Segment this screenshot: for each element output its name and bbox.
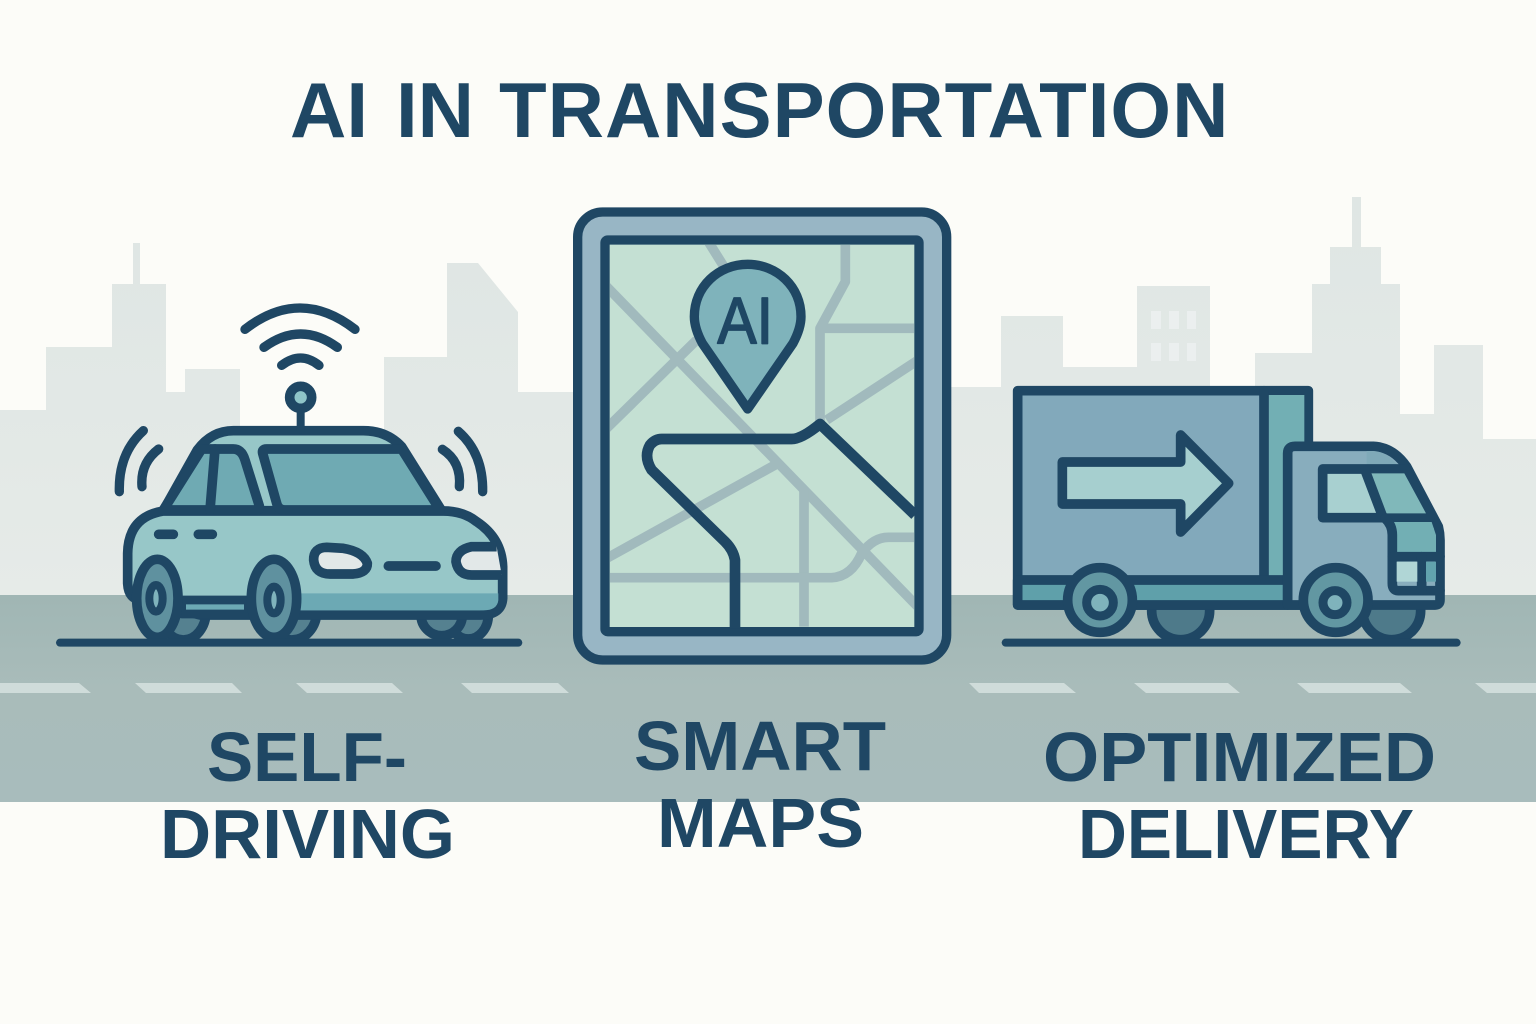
label: self-driving: DRIVING — [160, 795, 455, 873]
ground line — [60, 631, 518, 655]
window pillar — [210, 449, 215, 510]
title: AI — [290, 66, 390, 154]
side skirt — [182, 600, 248, 614]
front near wheel — [251, 559, 297, 637]
lower body band — [300, 593, 498, 610]
icon: delivery truck — [1006, 391, 1457, 643]
city skyline left — [0, 243, 575, 600]
cargo box — [1018, 391, 1308, 605]
ground line — [1006, 631, 1457, 655]
map screen — [605, 240, 919, 632]
label: optimized delivery: DELIVERY — [1078, 795, 1414, 873]
cargo arrow — [1062, 435, 1229, 532]
car body — [128, 511, 503, 615]
cabin — [163, 431, 442, 511]
icon: self-driving car — [60, 308, 518, 643]
title: IN — [396, 66, 496, 154]
AI location pin — [694, 264, 801, 409]
label: smart maps: MAPS — [657, 784, 864, 862]
chassis band — [1018, 580, 1288, 605]
front left headlight — [314, 547, 367, 574]
cargo door column — [1268, 395, 1304, 577]
label: optimized delivery — [1043, 718, 1436, 873]
door handles — [159, 520, 212, 549]
far wheels — [1152, 582, 1421, 640]
icon: smart map tablet — [578, 212, 947, 660]
navigation route — [647, 424, 915, 628]
road band — [0, 595, 1536, 802]
far wheels — [161, 583, 488, 640]
rear near wheel — [1068, 568, 1132, 632]
cab front grille — [1385, 518, 1440, 591]
label: smart maps: SMART — [634, 707, 886, 785]
map streets — [607, 242, 918, 630]
tablet frame — [578, 212, 947, 660]
rear near wheel — [137, 559, 178, 637]
title: TRANSPORTATION — [499, 66, 1229, 154]
windshield — [262, 449, 440, 510]
wifi signal — [245, 308, 355, 365]
label: self-driving — [160, 718, 455, 873]
front right headlight — [456, 547, 502, 575]
cab — [1288, 446, 1440, 605]
sensor waves right — [442, 431, 483, 492]
grille bar — [388, 551, 436, 580]
city skyline right — [950, 197, 1536, 600]
side windows — [163, 449, 259, 510]
antenna — [290, 386, 312, 430]
sensor waves left — [119, 431, 159, 492]
infographic scene — [0, 82, 1536, 858]
label: self-driving: SELF- — [207, 718, 407, 796]
pin label: AI — [717, 283, 773, 357]
label: optimized delivery: OPTIMIZED — [1043, 718, 1436, 796]
lane markings — [0, 683, 1536, 693]
box divider — [1249, 391, 1278, 580]
cab windows — [1323, 469, 1430, 518]
label: smart maps — [634, 707, 886, 862]
cab roof strip — [1367, 451, 1397, 465]
front near wheel — [1303, 568, 1368, 632]
